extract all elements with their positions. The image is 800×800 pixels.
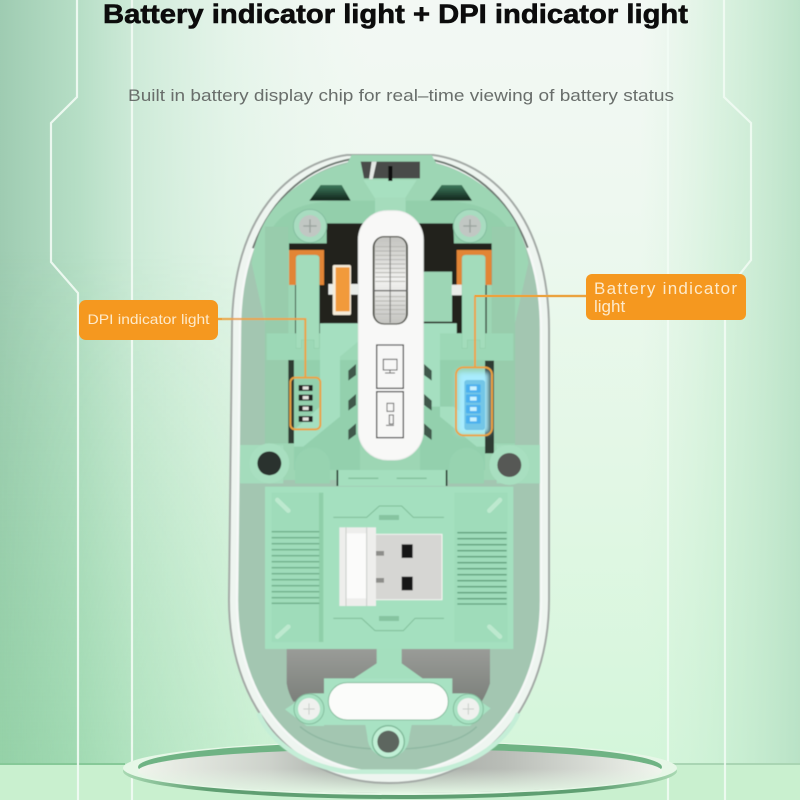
- green lower diagonal panels: [294, 360, 485, 470]
- mouse: [217, 155, 587, 783]
- USB small marks: [376, 551, 384, 583]
- DPI LED group: [299, 385, 313, 422]
- right plate panel: [454, 493, 508, 642]
- USB receiver: [339, 527, 442, 606]
- left bottom screw: [294, 694, 324, 724]
- shell shoulder shadow right: [428, 159, 541, 330]
- orange leader: DPI: [217, 319, 320, 429]
- orange roller: [333, 265, 351, 315]
- mouse inner body: [237, 160, 541, 773]
- wheel capsule top cap: [375, 198, 406, 214]
- top diagonal tab: [363, 180, 417, 198]
- white stadium window: [328, 683, 448, 720]
- gray bottom cavity: [287, 648, 490, 702]
- center neck tab: [352, 647, 424, 679]
- orange leader: battery: [456, 296, 587, 435]
- right green block: [423, 272, 452, 322]
- scroll wheel: [373, 236, 408, 325]
- white capsule: [358, 211, 423, 460]
- white axle: [328, 284, 462, 295]
- mint inner edge highlight: [258, 713, 518, 772]
- plate chevron lines: [333, 506, 444, 631]
- callout: DPI indicator light: [79, 300, 218, 340]
- USB white housing: [339, 527, 376, 606]
- black cavity: [289, 223, 492, 333]
- top right screw: [453, 209, 487, 243]
- callout: Battery indicator light: [586, 274, 746, 320]
- DPI callout leader link: [218, 318, 222, 320]
- orange highlight box: DPI: [290, 378, 320, 429]
- battery LED group: [457, 372, 489, 433]
- orange left mount: [289, 250, 324, 285]
- USB contact holes: [402, 544, 413, 590]
- display platform: [123, 741, 677, 799]
- top sensor notch: [361, 162, 420, 181]
- USB metal connector: [374, 534, 442, 600]
- left plate panel: [272, 493, 323, 642]
- bottom center boss: [372, 726, 404, 758]
- top left screw: [293, 209, 327, 243]
- upper darker tone: [273, 201, 507, 250]
- right arm: [462, 255, 485, 348]
- main USB plate: [265, 487, 513, 649]
- top dark triangles: [309, 185, 472, 201]
- mouse outer transparent shell: [229, 155, 549, 783]
- callout: DPI indicator light: DPI indicator light: [88, 311, 210, 327]
- right bottom screw: [453, 694, 483, 724]
- lower bosses: [240, 443, 540, 485]
- callout: Battery indicator light: light: [594, 297, 625, 316]
- dark side strips: [288, 360, 494, 453]
- lower plate assembly: [258, 470, 518, 772]
- decorative frame line: left: [51, 0, 132, 800]
- center chevron slots: [348, 364, 432, 440]
- top green frame: [252, 155, 528, 480]
- decorative frame line: right: [668, 0, 751, 800]
- orange right mount: [457, 250, 492, 285]
- shell shoulder shadow left: [240, 159, 352, 330]
- monitor button: [377, 345, 403, 388]
- bottom inner arc: [300, 727, 477, 749]
- subtitle: Built in battery display chip for real–time viewing of battery status: [128, 86, 674, 105]
- bottom tray: [285, 678, 491, 758]
- callout: Battery indicator light: Battery indicator: [594, 279, 737, 298]
- upper mechanism: [217, 155, 587, 485]
- orange highlight box: battery: [456, 367, 492, 435]
- side inner bands: [265, 227, 515, 443]
- green crossbars: [267, 333, 513, 361]
- center top tab: [337, 470, 447, 486]
- DPI button: [377, 392, 403, 438]
- left arm: [296, 255, 319, 348]
- battery callout leader link: [475, 295, 586, 297]
